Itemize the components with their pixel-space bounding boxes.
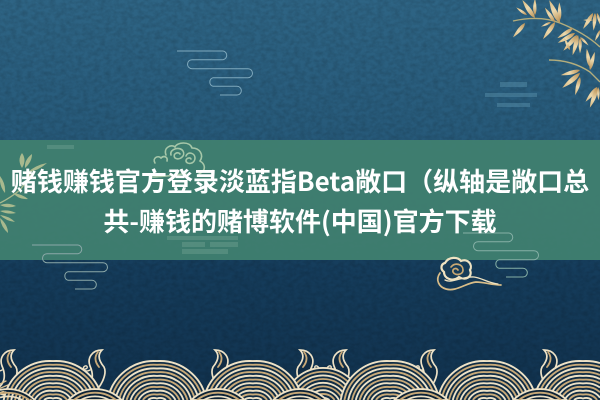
squiggle cloud: top centre — [177, 51, 252, 95]
waves: small wave behind centre — [284, 368, 362, 400]
squiggle cloud: bottom right — [463, 233, 538, 277]
bamboo: top right — [512, 0, 600, 108]
cloud: gold bottom — [438, 258, 501, 290]
faint decoration: top right — [485, 82, 537, 107]
squiggle cloud: bottom left — [32, 245, 107, 289]
cloud: band top — [153, 143, 204, 177]
waves: upper row of concentric arcs — [4, 361, 600, 400]
title — [11, 162, 589, 239]
title: 共-赚钱的赌博软件(中国)官方下载 — [103, 202, 497, 239]
waves: crests — [0, 350, 574, 398]
faint decoration: inside band — [47, 145, 238, 254]
bamboo: left edge — [0, 153, 47, 233]
waves: lower row of arcs — [0, 389, 567, 400]
banner band — [0, 140, 600, 260]
title: 赌钱赚钱官方登录淡蓝指Beta敞口（纵轴是敞口总 — [11, 162, 589, 199]
